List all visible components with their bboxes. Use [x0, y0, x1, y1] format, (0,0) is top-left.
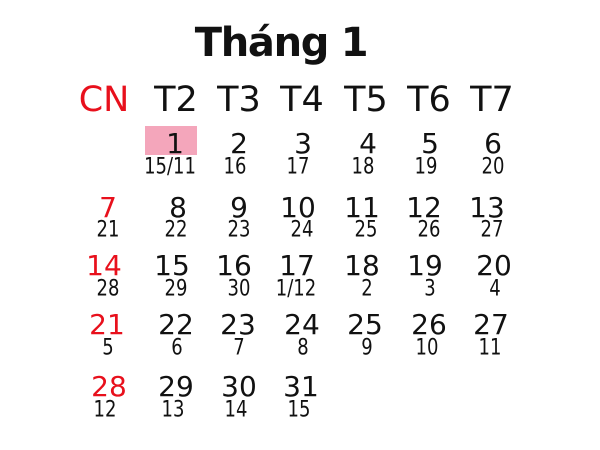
calendar grid: 22: [158, 308, 194, 341]
calendar grid: 9: [230, 191, 248, 224]
calendar grid: 27: [481, 216, 503, 242]
calendar grid: 23: [228, 216, 250, 242]
calendar grid: 27: [473, 308, 509, 341]
calendar grid: 7: [99, 191, 117, 224]
calendar grid: 3: [294, 127, 312, 160]
calendar grid: 4: [489, 275, 501, 302]
calendar grid: 25: [347, 308, 383, 341]
weekday header: T3: [217, 80, 261, 120]
calendar grid: 15/11: [144, 153, 196, 180]
calendar grid: 10: [280, 191, 316, 224]
calendar grid: 4: [359, 127, 377, 160]
calendar grid: 18: [344, 249, 380, 282]
calendar grid: 20: [476, 249, 512, 282]
calendar grid: 31: [283, 370, 319, 403]
calendar grid: 9: [361, 334, 373, 360]
calendar grid: 14: [86, 249, 122, 282]
calendar grid: 21: [89, 308, 125, 341]
calendar grid: 24: [284, 308, 320, 341]
calendar grid: 13: [469, 191, 505, 224]
weekday header: T7: [470, 80, 514, 120]
calendar grid: 11: [344, 191, 380, 224]
calendar grid: 29: [165, 275, 187, 302]
calendar grid: 23: [220, 308, 256, 341]
calendar grid: 19: [407, 249, 443, 282]
weekday header: [79, 80, 514, 120]
weekday header: T2: [154, 80, 198, 120]
highlight: today: [145, 126, 197, 155]
calendar grid: 22: [165, 216, 187, 242]
calendar grid: 7: [233, 334, 245, 360]
calendar grid: 25: [355, 216, 377, 242]
calendar grid: 3: [424, 275, 436, 302]
calendar grid: 5: [421, 127, 439, 160]
calendar grid: 15: [288, 396, 310, 422]
calendar grid: 14: [225, 396, 247, 422]
calendar grid: 29: [158, 370, 194, 403]
calendar grid: 1: [166, 127, 184, 160]
calendar grid: 19: [415, 153, 437, 180]
weekday header: T5: [344, 80, 388, 120]
calendar grid: 12: [406, 191, 442, 224]
calendar grid: 24: [291, 216, 313, 242]
weekday header: T6: [407, 80, 451, 120]
calendar grid: 5: [102, 334, 114, 360]
calendar grid: 10: [416, 334, 438, 360]
calendar grid: 17: [279, 249, 315, 282]
calendar grid: 20: [482, 153, 504, 180]
calendar grid: 1/12: [276, 275, 316, 302]
calendar grid: 30: [228, 275, 250, 302]
calendar grid: 28: [91, 370, 127, 403]
calendar grid: 13: [162, 396, 184, 422]
calendar grid: [86, 127, 512, 422]
calendar grid: 26: [418, 216, 440, 242]
calendar grid: 2: [230, 127, 248, 160]
calendar grid: 16: [216, 249, 252, 282]
calendar grid: 8: [297, 334, 309, 360]
weekday header: CN: [79, 80, 129, 120]
calendar grid: 30: [221, 370, 257, 403]
calendar grid: 11: [479, 334, 501, 360]
calendar grid: 15: [154, 249, 190, 282]
calendar grid: 8: [169, 191, 187, 224]
calendar grid: 17: [287, 153, 309, 180]
calendar grid: 6: [484, 127, 502, 160]
title: Tháng 1: [195, 20, 367, 66]
calendar grid: 28: [97, 275, 119, 302]
calendar grid: 18: [352, 153, 374, 180]
calendar grid: 2: [361, 275, 373, 302]
calendar grid: 26: [411, 308, 447, 341]
calendar grid: 16: [224, 153, 246, 180]
calendar grid: 6: [171, 334, 183, 360]
calendar grid: 21: [97, 216, 119, 242]
weekday header: T4: [280, 80, 324, 120]
calendar grid: 12: [94, 396, 116, 422]
